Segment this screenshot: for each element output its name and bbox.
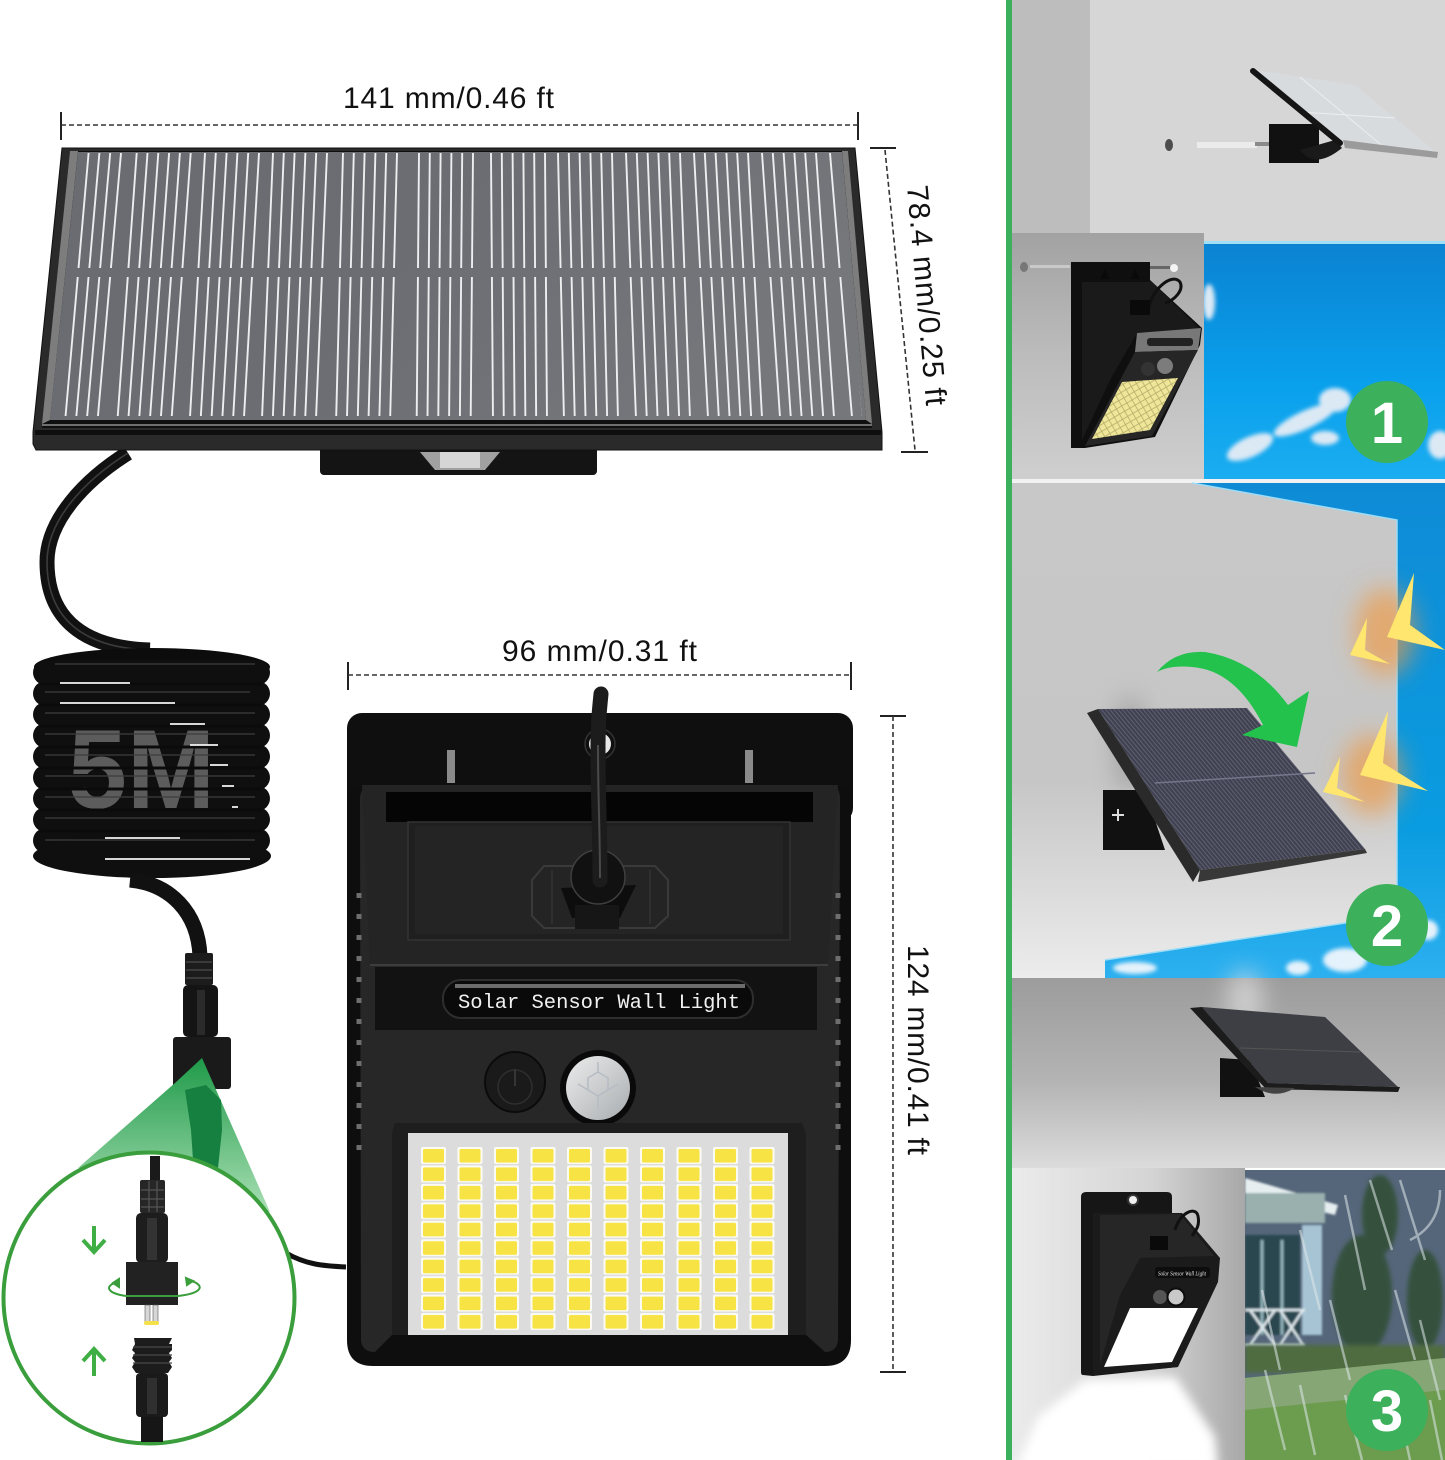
trees: [1332, 1175, 1443, 1355]
step 3 panel: rainy garden: [1245, 1170, 1445, 1460]
cable: coil to connector: [130, 880, 200, 956]
screws: [1020, 262, 1178, 272]
sun ray chevrons: [1323, 573, 1445, 802]
dimension: light width: 96 mm/0.31 ft: [502, 635, 698, 668]
lawn: [1245, 1358, 1445, 1460]
ledge wall: [1012, 233, 1204, 480]
green arrow: [1157, 652, 1309, 747]
sun glow: [1342, 588, 1415, 815]
step 3 panel: mounted panel: [1012, 970, 1445, 1168]
cable: from solar panel into coil: [47, 453, 150, 650]
step badge 3: 3: [1371, 1379, 1403, 1444]
side ridges: [359, 893, 838, 1150]
rotation arrow: [109, 1278, 200, 1296]
dimension: panel depth: [870, 148, 952, 452]
waterproof connector: [173, 953, 231, 1089]
upper connector plug: [126, 1156, 178, 1325]
down arrow: [83, 1226, 105, 1252]
LED recess: [375, 1123, 825, 1352]
label pill with product name: Solar Sensor Wall Light: [458, 992, 740, 1015]
step 1 panel: [1012, 0, 1445, 481]
porch: [1245, 1178, 1338, 1345]
wall hole and anchor: [1165, 139, 1277, 151]
body: [347, 785, 851, 1366]
step badge 2: 2: [1371, 894, 1403, 959]
power button: [485, 1052, 545, 1112]
up arrow: [83, 1349, 105, 1376]
solar panel front view: [33, 148, 906, 475]
dimension: panel depth: 78.4 mm/0.25 ft: [900, 184, 952, 407]
dimension: light height: 124 mm/0.41 ft: [901, 945, 934, 1156]
hood: [362, 785, 838, 965]
dimension: panel width: [61, 82, 858, 140]
lead cable up over the plate: [598, 694, 601, 880]
light beam: [1015, 1377, 1218, 1460]
zoom circle: connector detail: [4, 1152, 294, 1444]
5M length label: 5M: [68, 707, 215, 832]
green vertical divider: [1006, 0, 1012, 1460]
step badge 3: [1346, 1369, 1428, 1451]
step badge 1: 1: [1371, 391, 1403, 456]
rain: [1262, 1180, 1442, 1460]
hedge: [1245, 1345, 1445, 1373]
solar sensor wall light front view: [347, 694, 853, 1366]
cable grommet: [532, 850, 668, 929]
label band: [375, 967, 817, 1030]
step 2 panel: [1012, 483, 1445, 978]
sky: [1105, 483, 1445, 978]
dimension: panel width: 141 mm/0.46 ft: [343, 82, 555, 115]
tilted solar panel: [1253, 70, 1438, 163]
step 3 panel: wall with light: [1012, 1168, 1245, 1460]
label pill with product name: [443, 980, 753, 1018]
small product label: [1155, 1267, 1210, 1278]
step badge 1: [1346, 381, 1428, 463]
green zoom beam: [78, 1058, 270, 1212]
cable to light: [286, 1253, 346, 1267]
dimension: light width: [348, 635, 851, 690]
step badge 2: [1346, 884, 1428, 966]
small product label: Solar Sensor Wall Light: [1158, 1270, 1206, 1278]
sky: [1203, 241, 1445, 479]
lit wall light: [1081, 1192, 1220, 1376]
light angled view: [1071, 262, 1202, 448]
lower connector socket: [132, 1338, 172, 1442]
backplate: [347, 713, 853, 823]
mounted solar panel: [1087, 708, 1367, 882]
cable coil with 5M label: [33, 648, 271, 878]
white separator: [1012, 479, 1445, 483]
wall shadow: [1114, 695, 1146, 795]
PIR motion sensor: [560, 1050, 636, 1126]
dimension: light height: [880, 716, 934, 1372]
wall: [1012, 483, 1397, 978]
LED array: [408, 1133, 788, 1335]
